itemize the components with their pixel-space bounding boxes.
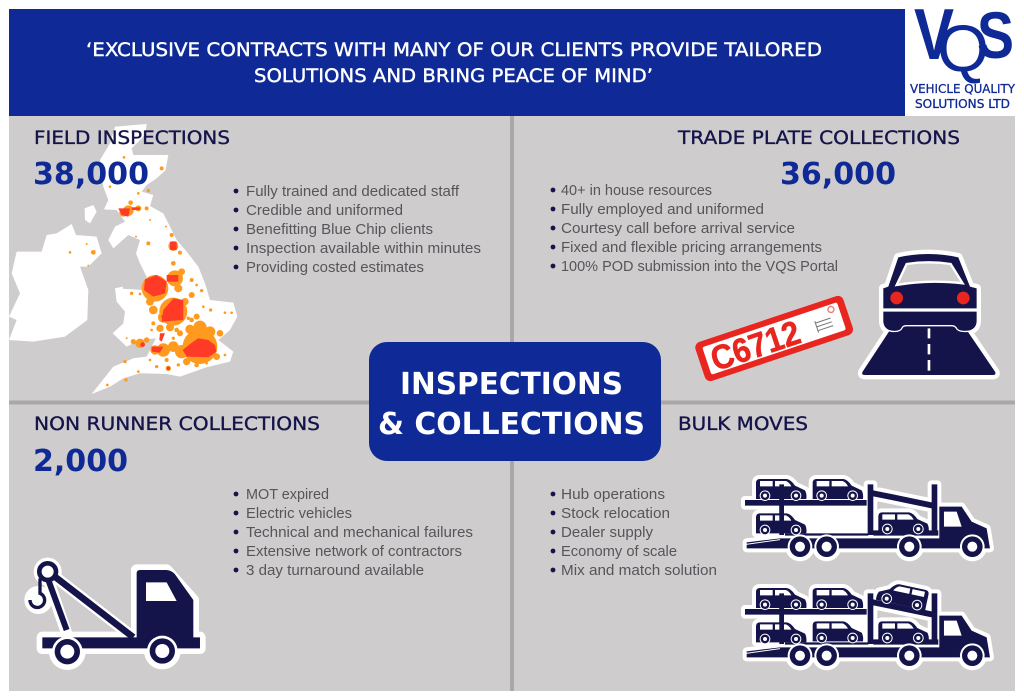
icon: car transporter with four cars [745,479,990,559]
logo: VQS: S [977,0,1014,72]
heading: bulk moves: BULK MOVES [678,413,808,435]
centre title box: INSPECTIONS [400,367,623,402]
number: 2,000: 2,000 [33,444,128,479]
bullet list: trade plate collections: Courtesy call before arrival service [561,220,795,237]
bullet list: bulk moves [551,486,717,579]
logo: VQS [910,0,1016,111]
logo: VQS: Q [937,11,989,85]
bullet list: bulk moves: Stock relocation [561,505,670,522]
header banner [9,9,905,116]
header banner: SOLUTIONS AND BRING PEACE OF MIND’ [254,65,653,87]
bullet list: bulk moves: Hub operations [561,486,665,503]
bullet list: non runner collections: Electric vehicles [246,505,352,522]
panel: field inspections [9,116,512,402]
heading: field inspections: FIELD INSPECTIONS [34,127,230,149]
map: UK and Ireland inspection heat map [9,124,237,394]
icon: car on road [862,254,995,375]
bullet list: trade plate collections: Fully employed and uniformed [561,201,764,218]
icon: tow truck [30,563,200,667]
logo: VQS: SOLUTIONS LTD [915,97,1010,111]
panel: trade plate collections [512,116,1015,402]
bullet list: trade plate collections [551,182,838,275]
bullet list: field inspections: Benefitting Blue Chip clients [246,221,433,238]
bullet list: trade plate collections: 100% POD submission into the VQS Portal [561,258,838,275]
bullet list: field inspections: Credible and uniformed [246,202,403,219]
bullet list: field inspections [234,183,481,276]
bullet list: non runner collections: Technical and mechanical failures [246,524,473,541]
bullet list: field inspections: Fully trained and dedicated staff [246,183,460,200]
centre title box [369,342,661,461]
panel: bulk moves [512,402,1015,691]
header banner: ‘EXCLUSIVE CONTRACTS WITH MANY OF OUR CLIENTS PROVIDE TAILORED [86,39,822,61]
bullet list: bulk moves: Economy of scale [561,543,677,560]
bullet list: trade plate collections: 40+ in house resources [561,182,712,199]
bullet list: non runner collections: 3 day turnaround available [246,562,424,579]
logo: VQS: VEHICLE QUALITY [910,82,1016,96]
bullet list: non runner collections: MOT expired [246,486,329,503]
bullet list: field inspections: Providing costed estimates [246,259,424,276]
icon: trade plate C6712: C6712 [706,314,805,379]
bullet list: trade plate collections: Fixed and flexible pricing arrangements [561,239,822,256]
panel: non runner collections [9,402,512,691]
bullet list: non runner collections [234,486,473,579]
centre title box: & COLLECTIONS [378,407,645,442]
bullet list: bulk moves: Dealer supply [561,524,653,541]
heading: non runner collections: NON RUNNER COLLECTIONS [34,413,320,435]
heading: trade plate collections: TRADE PLATE COLLECTIONS [677,127,960,149]
icon: car transporter with six cars [745,580,990,668]
number: 36,000: 36,000 [780,157,896,192]
icon: trade plate C6712 [694,294,855,383]
bullet list: bulk moves: Mix and match solution [561,562,717,579]
bullet list: field inspections: Inspection available within minutes [246,240,481,257]
number: 38,000: 38,000 [33,157,149,192]
bullet list: non runner collections: Extensive network of contractors [246,543,462,560]
